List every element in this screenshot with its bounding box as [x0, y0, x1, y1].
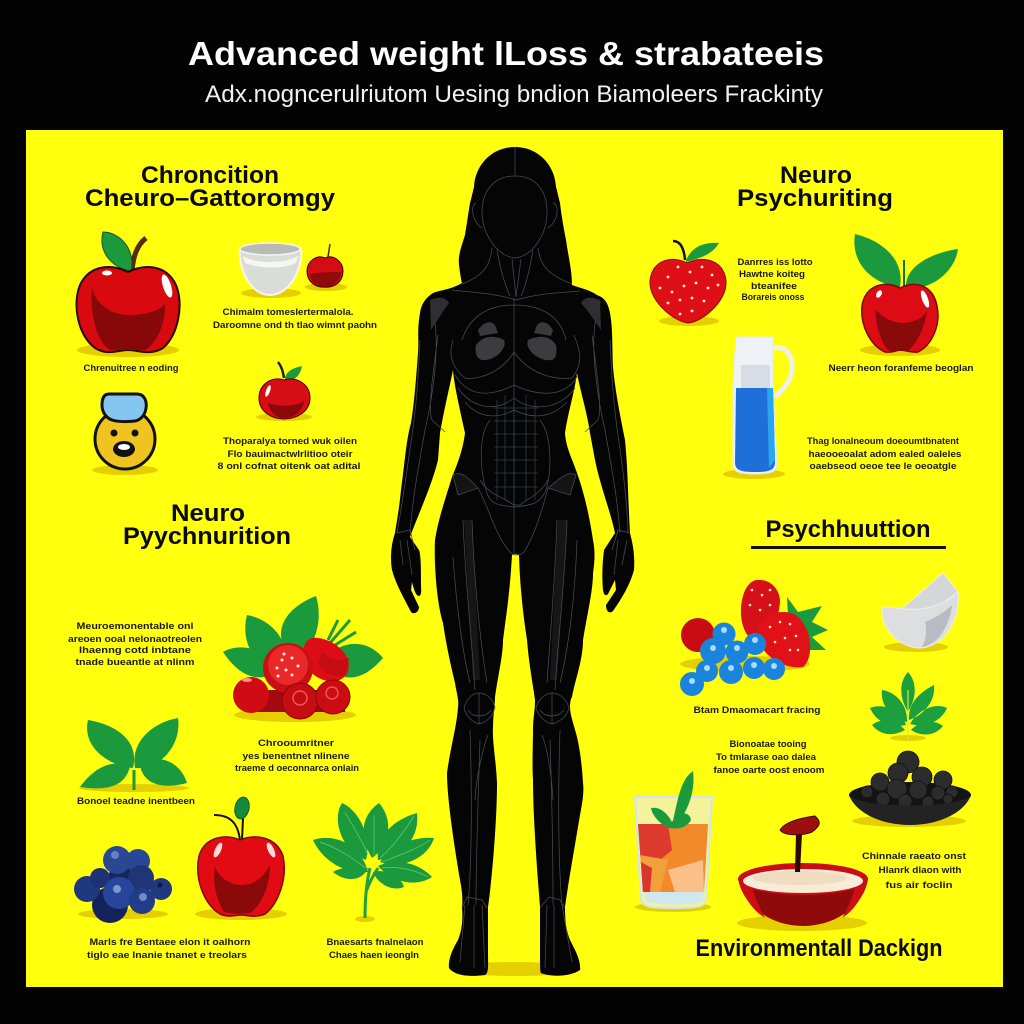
text: center left caption: traeme d oeconnarca onlain: [235, 763, 359, 774]
heading: left middle: [123, 500, 291, 550]
heading: left top: Cheuro–Gattoromgy: [85, 185, 336, 212]
heading: left top: Chroncition: [141, 162, 279, 189]
text: pitcher caption: haeooeoalat adom ealed oaleles: [808, 449, 962, 460]
icon: large apple: [76, 232, 180, 357]
heading: right top: [737, 162, 893, 212]
heading: right middle with rule: Psychhuuttion: [766, 516, 930, 543]
heading: right top: Neuro: [780, 162, 852, 189]
text: strawberry caption: Hawtne koiteg: [739, 269, 805, 280]
icon: iced drink glass: [635, 771, 712, 912]
icon: bowl and cherry: [240, 243, 347, 298]
text: leaves caption: Bonoel teadne inentbeen: [77, 796, 195, 807]
text: right middle caption: To tmlarase oao dalea: [716, 752, 817, 763]
icon: smiling face with cap: [92, 394, 158, 475]
text: apple caption right: Neerr heon foranfeme beoglan: [828, 363, 974, 374]
text: left mid block: [68, 621, 202, 668]
icon: green leaves pair: [79, 718, 189, 792]
text: center left caption: Chrooumritner: [258, 738, 334, 749]
text: center left caption: yes benentnet nlinene: [242, 751, 350, 762]
heading: environmental: Environmentall Dackign: [696, 935, 942, 962]
human body figure: [391, 147, 634, 976]
text: blueberry and apple caption: tiglo eae lnanie tnanet e treolars: [87, 950, 247, 961]
text: bowl caption: Daroomne ond th tlao wimnt paohn: [213, 320, 377, 331]
title: Advanced weight lLoss & strabateeis: [188, 35, 824, 72]
subtitle: Adx.nogncerulriutom Uesing bndion Biamoleers Frackinty: [205, 81, 823, 108]
icon: branching plant: [313, 803, 434, 922]
icon: berries and leaves: [223, 596, 383, 722]
text: berries caption: Btam Dmaomacart fracing: [694, 705, 821, 716]
icon: mortar and pestle: [882, 573, 958, 652]
text: pitcher caption: oaebseod oeoe tee le oeoatgle: [810, 461, 956, 472]
text: bowl caption: Chimalm tomeslertermalola.: [222, 307, 354, 318]
text: bowl caption right: Chinnale raeato onst: [862, 851, 967, 862]
text: left mid block: Ihaenng cotd inbtane: [79, 645, 191, 656]
icon: red apple with bud: [195, 796, 287, 920]
heading: right middle with rule: [751, 516, 946, 549]
text: bowl caption right: fus air foclin: [886, 880, 953, 891]
text: plant caption: Bnaesarts fnalnelaon: [326, 937, 424, 948]
text: blueberry and apple caption: Marls fre Bentaee elon it oalhorn: [90, 937, 251, 948]
text: plant caption: Chaes haen ieongln: [329, 950, 419, 961]
icon: blueberries: [74, 846, 172, 923]
text: right middle caption: Bionoatae tooing: [730, 739, 807, 750]
panel: yellow background: [26, 130, 1003, 987]
icon: pitcher of blue water: [723, 337, 792, 479]
text: left mid block: Meuroemonentable onl: [76, 621, 194, 632]
text: bowl caption right: Hlanrk dlaon with: [878, 865, 962, 876]
heading: left middle: Neuro: [171, 500, 245, 527]
text: small apple caption: 8 onl cofnat oitenk oat adital: [218, 461, 360, 472]
heading: left top: [85, 162, 336, 212]
text: small apple caption: Thoparalya torned wuk oilen: [223, 436, 357, 447]
text: right middle caption: [714, 739, 824, 776]
text: left mid block: areoen ooal nelonaotreolen: [68, 634, 202, 645]
text: apple caption: Chrenuitree n eoding: [84, 363, 179, 374]
icon: red bowl with drip: [737, 816, 868, 931]
icon: black bowl of berries: [849, 751, 971, 827]
text: strawberry caption: Danrres iss lotto: [738, 257, 813, 268]
text: strawberry caption: bteanifee: [751, 281, 797, 292]
text: plant caption: [326, 937, 424, 961]
text: small apple caption: [218, 436, 360, 472]
text: bowl caption: [213, 307, 377, 331]
text: strawberry caption: Borareis onoss: [742, 292, 804, 303]
text: bowl caption right: [862, 851, 967, 891]
icon: mixed berries: [680, 580, 828, 696]
heading: right top: Psychuriting: [737, 185, 893, 212]
text: blueberry and apple caption: [87, 937, 251, 961]
icon: green herb: [870, 672, 947, 742]
text: strawberry caption: [738, 257, 813, 303]
icon: apple with two leaves: [854, 234, 958, 356]
text: center left caption: [235, 738, 359, 774]
text: left mid block: tnade bueantle at nlinm: [76, 657, 194, 668]
text: small apple caption: Flo bauimactwlrlitioo oteir: [228, 449, 353, 460]
icon: small apple: [256, 362, 312, 421]
heading: left middle: Pyychnurition: [123, 523, 291, 550]
icon: strawberry: [650, 241, 726, 326]
text: pitcher caption: Thag lonalneoum doeoumtbnatent: [807, 436, 960, 447]
text: right middle caption: fanoe oarte oost enoom: [714, 765, 824, 776]
text: pitcher caption: [807, 436, 962, 472]
